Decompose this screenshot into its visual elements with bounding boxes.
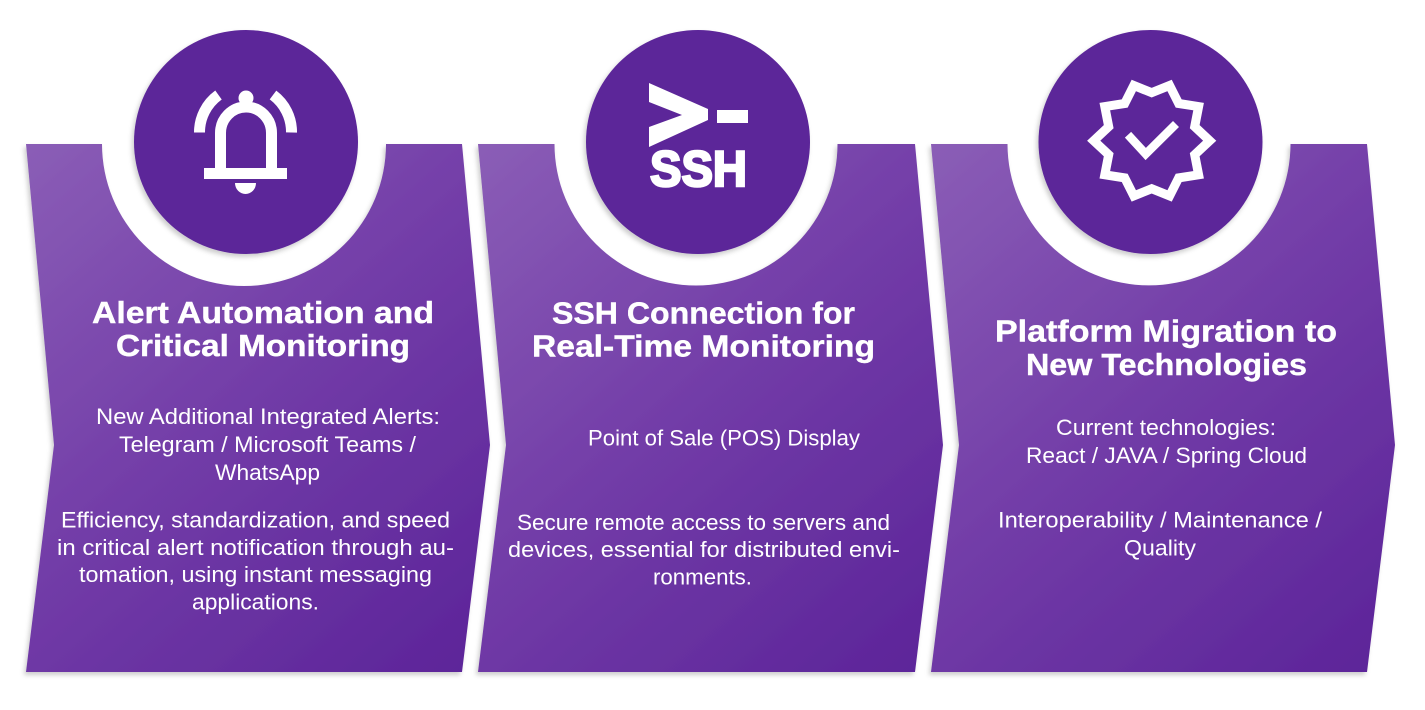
icon: verified badge [1094, 86, 1210, 196]
quality text: Quality [1124, 536, 1196, 560]
secure access text: devices, essential for distributed envi- [508, 537, 900, 562]
icon circle 1 [134, 30, 358, 254]
technologies text: Current technologies: [1056, 415, 1276, 440]
technologies text: React / JAVA / Spring Cloud [1026, 443, 1307, 468]
panel shape 2 [478, 144, 943, 672]
integrations text: New Additional Integrated Alerts: [96, 404, 440, 429]
efficiency text: in critical alert notification through au- [57, 535, 454, 560]
heading 1: Alert Automation and [92, 296, 434, 330]
efficiency text: applications. [192, 590, 319, 614]
panel shape 1 [26, 144, 490, 672]
secure access text [508, 510, 900, 590]
panel shape 3 [931, 144, 1395, 672]
secure access text: Secure remote access to servers and [517, 510, 890, 535]
panel: alert automation [26, 30, 490, 672]
icon circle 2 [586, 30, 810, 254]
heading 2: SSH Connection for [552, 296, 855, 330]
efficiency text: Efficiency, standardization, and speed [61, 508, 450, 532]
quality text [998, 508, 1323, 560]
integrations text: Telegram / Microsoft Teams / [119, 432, 417, 457]
integrations text: WhatsApp [215, 460, 320, 485]
icon: SSH terminal: SSH [650, 141, 747, 197]
integrations text [96, 404, 440, 485]
heading 1: Critical Monitoring [116, 329, 410, 363]
icon circle 3 [1038, 30, 1262, 254]
point of sale text: Point of Sale (POS) Display [588, 426, 860, 450]
technologies text [1026, 415, 1307, 468]
panel: platform migration [931, 30, 1395, 672]
panel: SSH connection [478, 30, 943, 672]
icon: bell [199, 90, 292, 194]
quality text: Interoperability / Maintenance / [998, 508, 1323, 532]
efficiency text: tomation, using instant messaging [79, 562, 432, 587]
heading 3: New Technologies [1026, 348, 1307, 382]
heading 2: Real-Time Monitoring [532, 330, 875, 364]
heading 3 [995, 314, 1337, 382]
icon: SSH terminal [649, 83, 748, 197]
heading 1 [92, 296, 434, 363]
secure access text: ronments. [653, 564, 752, 590]
heading 3: Platform Migration to [995, 314, 1337, 348]
heading 2 [532, 296, 875, 364]
efficiency text [57, 508, 454, 614]
